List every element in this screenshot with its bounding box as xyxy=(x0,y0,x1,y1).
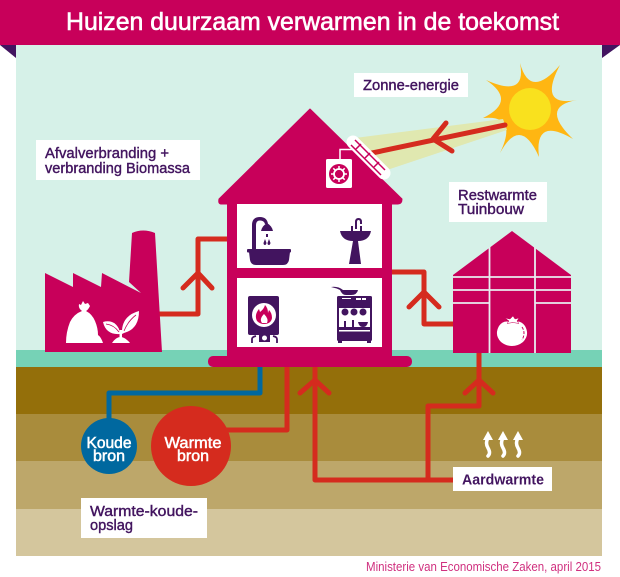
icon: sun xyxy=(483,63,577,157)
sky background panel xyxy=(16,45,602,351)
icon: tomato xyxy=(497,316,527,346)
icon: bath and shower xyxy=(247,217,291,265)
heat source circle xyxy=(151,406,231,486)
upper room xyxy=(237,204,382,268)
solar collector box xyxy=(326,150,354,188)
label: Aardwarmte xyxy=(453,467,552,491)
source credit: Ministerie van Economische Zaken, april 2015 xyxy=(366,560,601,574)
heat source circle: bron xyxy=(177,448,209,465)
pipe: geothermal network xyxy=(300,350,493,480)
lower room xyxy=(237,278,382,347)
label: Zonne-energie xyxy=(354,73,468,97)
foundation xyxy=(208,356,412,367)
title banner xyxy=(0,0,620,58)
cold source circle: Koude xyxy=(86,435,132,452)
greenhouse xyxy=(453,231,571,353)
title: Huizen duurzaam verwarmen in de toekomst xyxy=(66,8,559,36)
pipe: greenhouse to house xyxy=(390,272,455,324)
label: Restwarmte Tuinbouw xyxy=(449,182,547,222)
icon: sink xyxy=(340,218,371,264)
cold source circle xyxy=(81,418,137,474)
icon: plant xyxy=(103,311,139,343)
label: Warmte-koude-opslag xyxy=(81,498,207,538)
solar panel xyxy=(351,140,385,175)
pipe: factory to house xyxy=(158,239,230,314)
label: Afvalverbranding xyxy=(36,140,200,180)
icon: boiler xyxy=(248,296,279,343)
label: Aardwarmte: Aardwarmte xyxy=(462,472,544,488)
arrow: solar energy xyxy=(372,123,505,153)
house xyxy=(208,109,412,367)
pipe: heat source xyxy=(225,365,287,430)
icon: stove with pan xyxy=(331,287,372,343)
label: Restwarmte Tuinbouw: Tuinbouw xyxy=(458,202,525,218)
sun beam xyxy=(355,119,507,170)
ground layers xyxy=(16,350,602,556)
label: Zonne-energie: Zonne-energie xyxy=(363,78,459,94)
icon: waste bag xyxy=(66,301,103,343)
cold source circle: bron xyxy=(93,448,125,465)
label: Restwarmte Tuinbouw: Restwarmte xyxy=(458,188,537,204)
walls xyxy=(227,200,392,360)
label: Afvalverbranding: verbranding Biomassa xyxy=(45,161,191,177)
label: Afvalverbranding: Afvalverbranding + xyxy=(45,146,169,162)
roof xyxy=(219,109,402,204)
icon: rising heat arrows xyxy=(483,431,523,456)
pipe: cold source xyxy=(109,365,260,425)
label: Warmte-koude-opslag: opslag xyxy=(90,518,133,534)
factory xyxy=(45,230,162,352)
heat source circle: Warmte xyxy=(164,435,222,452)
label: Warmte-koude-opslag: Warmte-koude- xyxy=(90,504,198,520)
